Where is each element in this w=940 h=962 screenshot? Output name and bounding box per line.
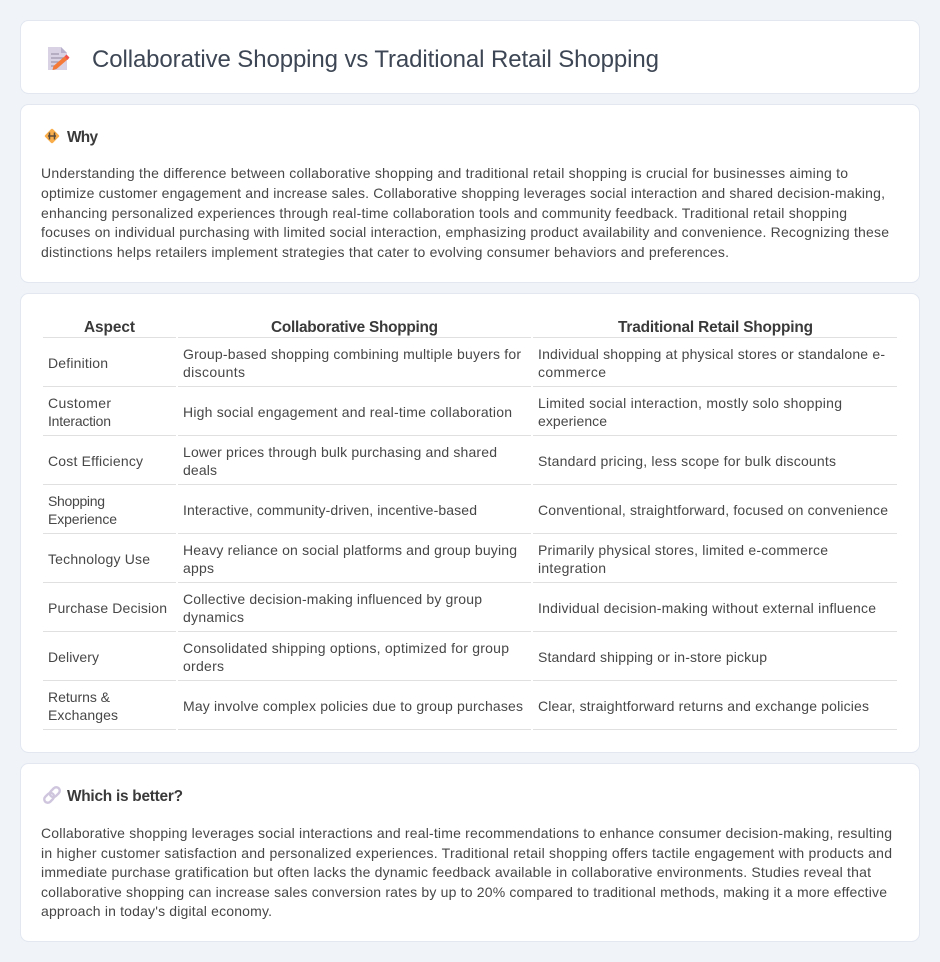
table header row: Collaborative Shopping — [271, 319, 438, 336]
row: technology use: Primarily physical stores, limited e-commerce — [538, 542, 828, 558]
row: returns and exchanges: May involve complex policies due to group purchases — [183, 698, 523, 714]
row: delivery: Standard shipping or in-store pickup — [538, 649, 767, 665]
row: delivery: Consolidated shipping options, optimized for group — [183, 640, 509, 656]
row: definition: Group-based shopping combining multiple buyers for — [183, 346, 521, 362]
row: purchase decision: Individual decision-making without external influence — [538, 600, 876, 616]
row: shopping experience — [48, 493, 888, 527]
row: customer interaction: experience — [538, 413, 607, 429]
text block: which is better paragraph: collaborative shopping can increase sales conversion rates by up to 20% compared to traditional methods, making it a more effective — [41, 884, 887, 900]
row: definition: Individual shopping at physical stores or standalone e- — [538, 346, 885, 362]
row: definition — [48, 346, 885, 380]
icon: link — [43, 786, 61, 804]
row: technology use: apps — [183, 560, 214, 576]
row: purchase decision: Collective decision-making influenced by group — [183, 591, 482, 607]
heading: why: Why — [67, 129, 98, 146]
row: technology use — [48, 542, 828, 576]
row: customer interaction: Customer — [48, 395, 111, 411]
row: cost efficiency: Lower prices through bulk purchasing and shared — [183, 444, 497, 460]
row: customer interaction: High social engagement and real-time collaboration — [183, 404, 512, 420]
row: delivery: Delivery — [48, 649, 99, 665]
table header row: Traditional Retail Shopping — [618, 319, 813, 336]
text block: which is better paragraph: in higher customer satisfaction and personalized experiences. Traditional retail shopping offers tactile engagement with products and — [41, 845, 892, 861]
row: customer interaction — [48, 395, 842, 429]
row: returns and exchanges: Exchanges — [48, 707, 118, 723]
row: technology use: Technology Use — [48, 551, 150, 567]
text block: which is better paragraph: immediate purchase gratification but often lacks the dynamic feedback available in collaborative environments. Studies reveal that — [41, 864, 871, 880]
text block: why paragraph — [41, 165, 889, 260]
row: delivery: orders — [183, 658, 224, 674]
icon: document with pencil — [48, 47, 70, 70]
row: shopping experience: Interactive, community-driven, incentive-based — [183, 502, 477, 518]
row: purchase decision — [48, 591, 876, 625]
heading: which is better: Which is better? — [67, 788, 183, 805]
row: purchase decision: Purchase Decision — [48, 600, 167, 616]
text block: which is better paragraph: Collaborative shopping leverages social interactions and real-time recommendations to enhance consumer decision-making, resulting — [41, 825, 892, 841]
row: returns and exchanges: Clear, straightforward returns and exchange policies — [538, 698, 869, 714]
row: cost efficiency: Cost Efficiency — [48, 453, 143, 469]
row: definition: commerce — [538, 364, 606, 380]
row: cost efficiency — [48, 444, 836, 478]
title: Collaborative Shopping vs Traditional Retail Shopping — [92, 46, 659, 73]
text block: why paragraph: optimize customer engagement and increase sales. Collaborative shopping leverages social interaction and shared decision-making, — [41, 185, 885, 201]
row: delivery — [48, 640, 767, 674]
table header row — [84, 319, 813, 336]
panel: comparison table — [20, 294, 920, 752]
row: technology use: integration — [538, 560, 606, 576]
icon: diamond sign — [44, 128, 60, 144]
text block: which is better paragraph — [41, 825, 892, 919]
panel: which is better — [20, 764, 920, 942]
row: definition: discounts — [183, 364, 245, 380]
row: shopping experience: Shopping — [48, 493, 105, 509]
row: shopping experience: Experience — [48, 511, 117, 527]
text block: which is better paragraph: approach in today's digital economy. — [41, 903, 272, 919]
panel: title header — [20, 20, 920, 94]
row: technology use: Heavy reliance on social platforms and group buying — [183, 542, 517, 558]
row: returns and exchanges — [48, 689, 869, 723]
row: cost efficiency: Standard pricing, less scope for bulk discounts — [538, 453, 836, 469]
row: definition: Definition — [48, 355, 108, 371]
row: returns and exchanges: Returns & — [48, 689, 111, 705]
row: cost efficiency: deals — [183, 462, 217, 478]
text block: why paragraph: distinctions helps retailers implement strategies that cater to evolving consumer behaviors and preferences. — [41, 244, 729, 260]
row: shopping experience: Conventional, straightforward, focused on convenience — [538, 502, 888, 518]
panel: why — [20, 104, 920, 282]
text block: why paragraph: focuses on individual purchasing with limited social interaction, emphasizing product availability and convenience. Recognizing these — [41, 224, 889, 240]
table header row: Aspect — [84, 319, 135, 336]
row: purchase decision: dynamics — [183, 609, 244, 625]
row: customer interaction: Interaction — [48, 413, 111, 429]
text block: why paragraph: Understanding the difference between collaborative shopping and traditional retail shopping is crucial for businesses aiming to — [41, 165, 848, 181]
text block: why paragraph: enhancing personalized experiences through real-time collaboration tools and community feedback. Traditional retail shopping — [41, 205, 847, 221]
row: customer interaction: Limited social interaction, mostly solo shopping — [538, 395, 842, 411]
